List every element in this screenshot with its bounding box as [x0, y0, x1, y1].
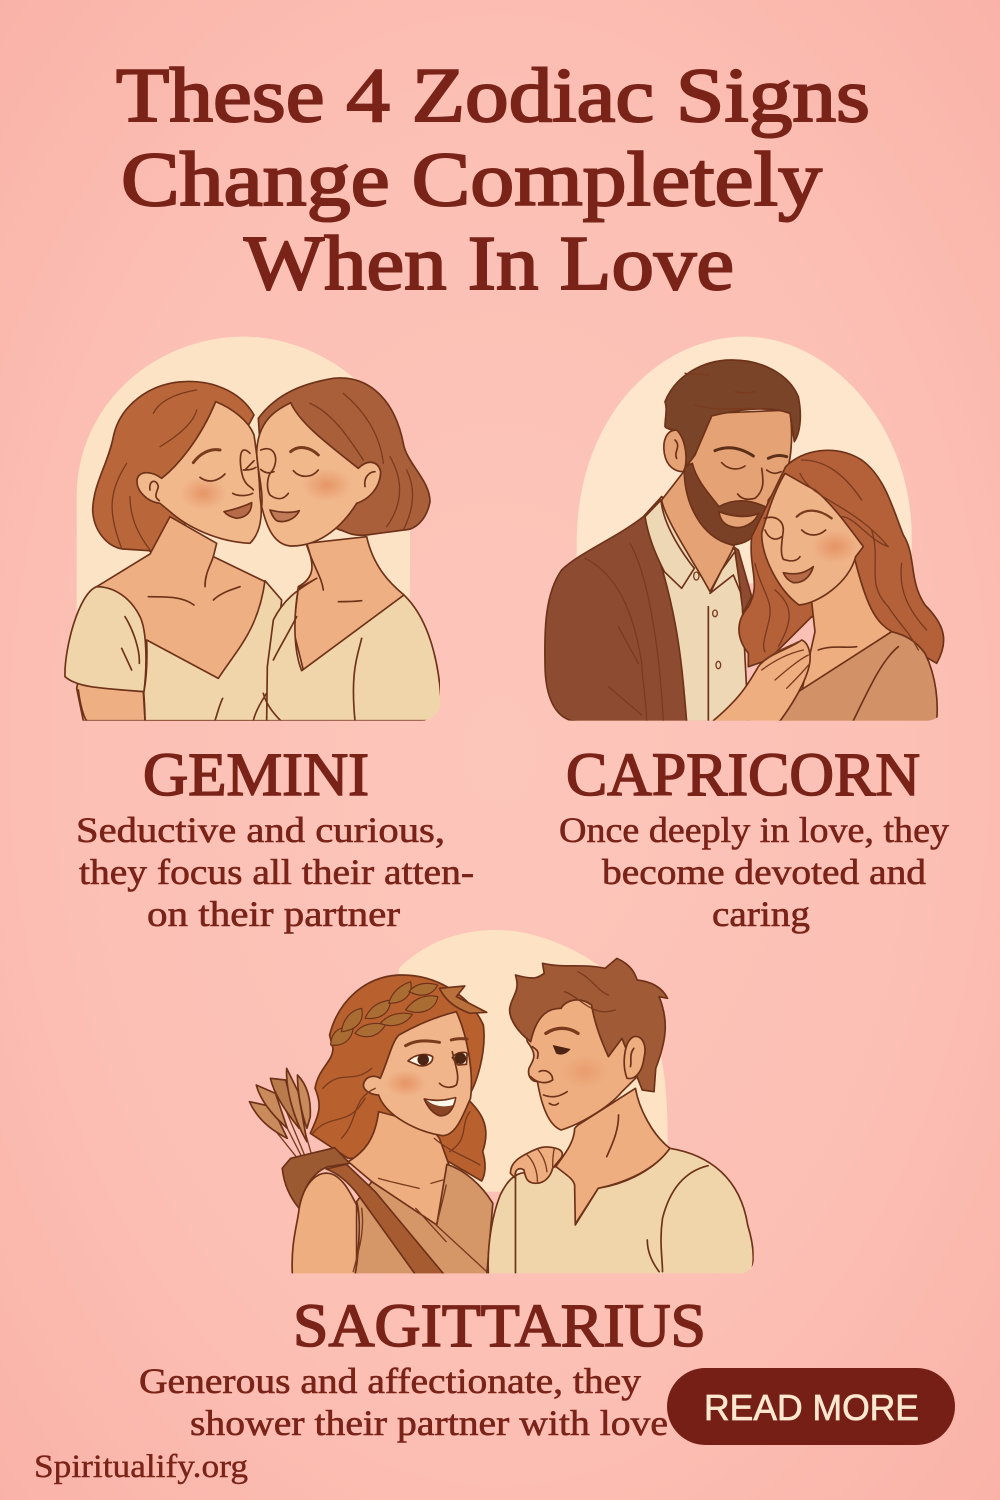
man — [545, 360, 800, 722]
Capricorn description: caring — [712, 894, 810, 934]
Sagittarius description: Generous and affectionate, they — [139, 1361, 641, 1401]
laurel wreath — [331, 982, 438, 1045]
Capricorn heading: CAPRICORN — [566, 742, 920, 809]
arch backdrop — [577, 337, 912, 583]
title: These 4 Zodiac Signs — [116, 52, 870, 138]
site credit: Spiritualify.org — [34, 1449, 248, 1485]
right woman — [253, 378, 442, 721]
woman — [712, 450, 944, 723]
arch backdrop — [399, 930, 668, 1192]
illustration: Capricorn couple — [545, 337, 944, 723]
title: Change Completely — [121, 136, 823, 222]
Gemini heading: GEMINI — [143, 742, 369, 809]
Sagittarius heading: SAGITTARIUS — [293, 1293, 706, 1360]
Sagittarius description — [139, 1361, 668, 1443]
title — [116, 52, 870, 306]
woman — [282, 975, 493, 1275]
title: When In Love — [244, 220, 734, 306]
read more button: READ MORE — [704, 1387, 919, 1428]
Gemini description: Seductive and curious, — [76, 810, 445, 850]
Gemini description: on their partner — [147, 894, 400, 934]
Capricorn description: Once deeply in love, they — [559, 810, 949, 850]
man — [488, 958, 753, 1275]
arrows — [249, 1068, 312, 1158]
Capricorn description — [559, 810, 949, 934]
illustration: Sagittarius couple — [249, 930, 753, 1275]
Capricorn description: become devoted and — [602, 852, 926, 892]
Sagittarius description: shower their partner with love — [190, 1403, 668, 1443]
read more button — [667, 1368, 955, 1445]
arch backdrop — [77, 337, 410, 663]
left woman — [65, 381, 282, 721]
Gemini description — [76, 810, 474, 934]
illustration: Gemini couple — [65, 337, 442, 721]
Gemini description: they focus all their atten- — [79, 852, 474, 892]
